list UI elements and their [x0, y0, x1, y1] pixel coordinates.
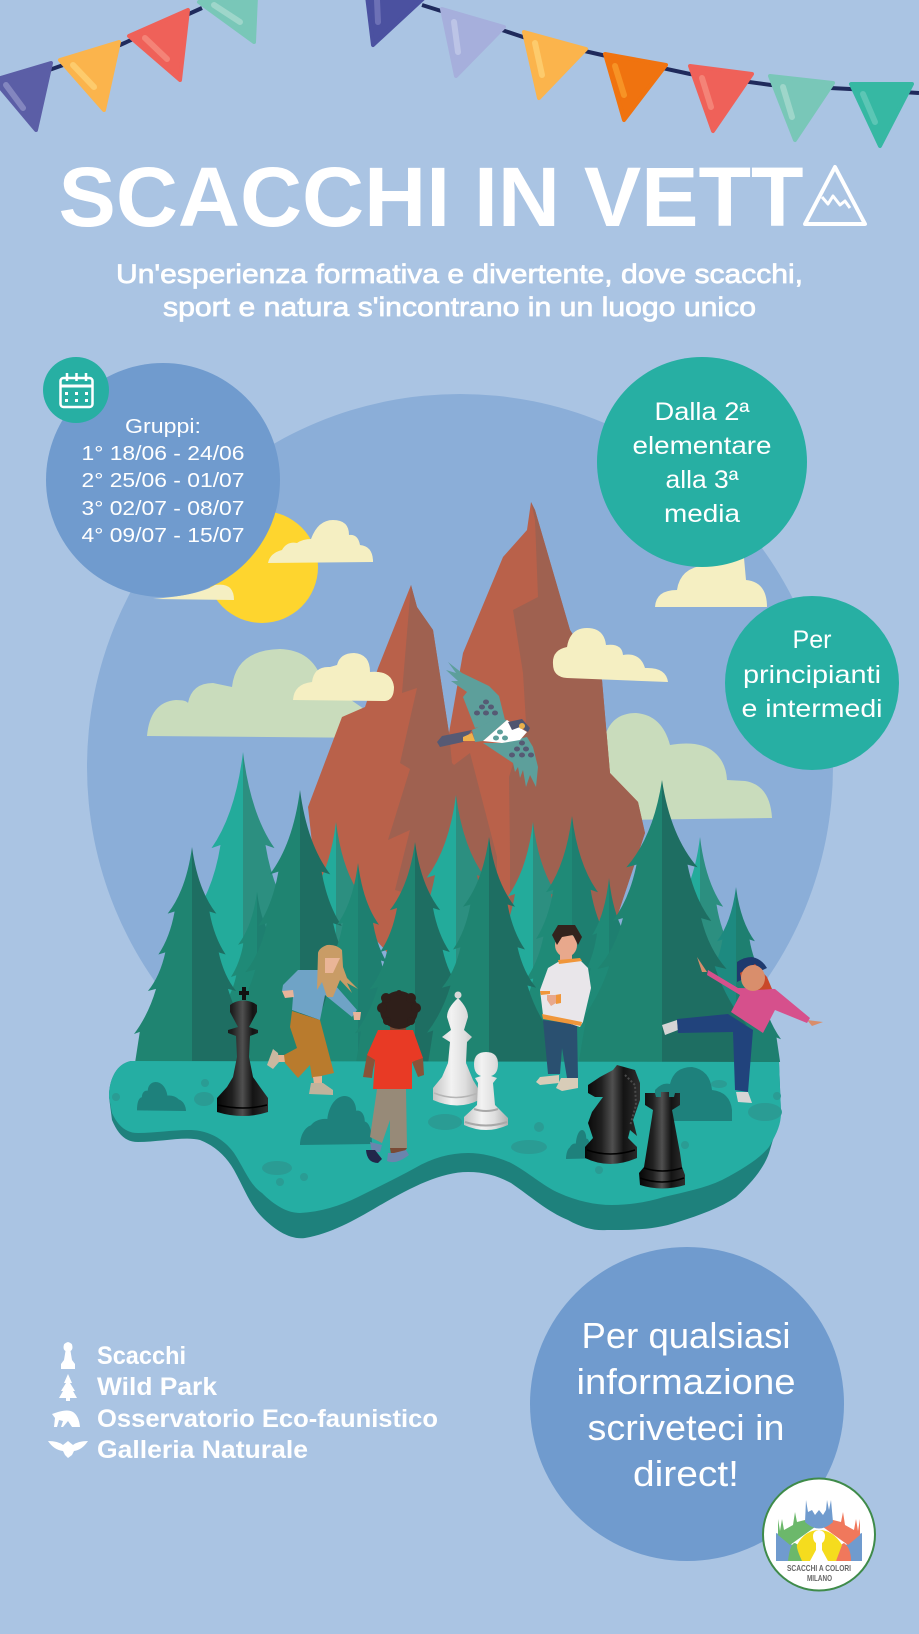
bunting: right string	[367, 0, 919, 146]
panel: level	[725, 596, 899, 770]
chess piece: white bishop	[433, 992, 479, 1106]
panel: contact: informazione	[576, 1361, 796, 1402]
chess piece: white pawn	[464, 1052, 508, 1130]
title: SCACCHI IN VETT	[58, 150, 804, 244]
legend: Osservatorio Eco-faunistico	[97, 1405, 438, 1433]
logo: MILANO	[807, 1573, 832, 1583]
icon: tree	[59, 1374, 77, 1401]
background circle	[87, 394, 833, 1140]
panel: contact: Per qualsiasi	[582, 1315, 790, 1356]
subtitle: sport e natura s'incontrano in un luogo unico	[163, 292, 756, 322]
ground bushes	[137, 1067, 732, 1159]
panel: level: Per	[792, 626, 832, 654]
panel: dates: 1° 18/06 - 24/06	[82, 442, 244, 465]
icon: calendar	[43, 357, 109, 423]
panel: dates: 2° 25/06 - 01/07	[82, 469, 244, 492]
panel: school age: Dalla 2ª	[654, 398, 750, 426]
panel: dates	[46, 363, 280, 597]
clouds: green	[147, 649, 772, 820]
panel: dates: 4° 09/07 - 15/07	[82, 524, 244, 547]
icon: mountain	[805, 167, 865, 224]
clouds: cream	[153, 520, 767, 701]
icon: eagle	[48, 1441, 88, 1458]
logo: SCACCHI A COLORI	[787, 1563, 851, 1573]
subtitle: Un'esperienza formativa e divertente, dove scacchi,	[116, 259, 803, 289]
panel: contact: direct!	[633, 1453, 739, 1494]
bunting: left string	[0, 0, 256, 130]
panel: contact: scriveteci in	[588, 1407, 784, 1448]
ground island	[109, 1061, 782, 1238]
child: dancing girl	[662, 957, 823, 1103]
child: blonde girl	[267, 945, 361, 1095]
legend	[48, 1342, 438, 1464]
chess piece: black king	[217, 987, 268, 1116]
icon: sun	[206, 511, 318, 623]
panel: school age: media	[664, 500, 740, 528]
child: boy in red shirt	[363, 990, 424, 1163]
icon: bear	[52, 1410, 80, 1427]
panel: contact	[530, 1247, 844, 1561]
logo	[763, 1478, 875, 1590]
panel: school age: elementare	[632, 432, 772, 460]
panel: school age	[597, 357, 807, 567]
panel: dates: 3° 02/07 - 08/07	[82, 497, 244, 520]
icon: pawn	[61, 1342, 75, 1369]
legend: Scacchi	[97, 1342, 186, 1370]
mountains	[308, 502, 645, 957]
panel: level: e intermedi	[742, 695, 882, 723]
panel: dates: Gruppi:	[125, 415, 201, 438]
ground spots	[112, 1079, 782, 1186]
legend: Wild Park	[97, 1373, 217, 1401]
panel: school age: alla 3ª	[666, 466, 739, 494]
chess piece: black rook	[639, 1092, 685, 1188]
subtitle	[116, 259, 803, 322]
chess piece: black knight	[585, 1065, 640, 1164]
panel: level: principianti	[743, 661, 881, 689]
bird	[437, 662, 538, 787]
child: boy in white sweater	[536, 925, 591, 1091]
legend: Galleria Naturale	[97, 1436, 308, 1464]
forest	[134, 752, 781, 1062]
